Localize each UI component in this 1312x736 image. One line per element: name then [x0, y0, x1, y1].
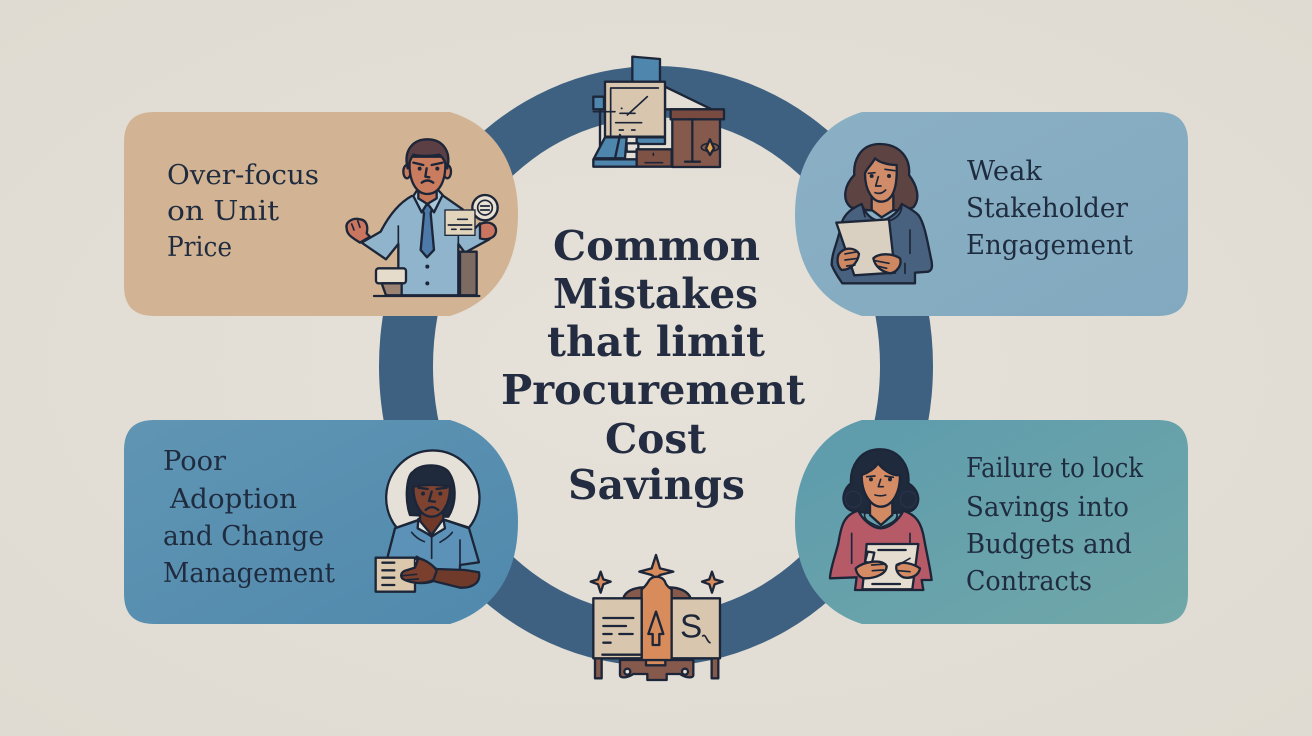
- label: over-focus on unit price: on Unit: [167, 196, 279, 227]
- icon: budget documents and arrow: [591, 555, 723, 680]
- glyph: S: S: [680, 608, 702, 645]
- label: weak stakeholder engagement: Engagement: [966, 230, 1133, 261]
- title: Procurement: [501, 366, 805, 414]
- title: Mistakes: [553, 270, 758, 318]
- label: weak stakeholder engagement: Stakeholder: [966, 193, 1128, 224]
- panel: poor adoption and change management: [124, 420, 518, 624]
- label: poor adoption and change management: Adoption: [169, 484, 297, 515]
- label: failure to lock savings into budgets and contracts: Failure to lock: [966, 453, 1144, 484]
- central ring: [379, 66, 933, 666]
- label: poor adoption and change management: Management: [163, 558, 335, 589]
- title: that limit: [547, 318, 765, 366]
- title: Common: [553, 222, 760, 270]
- panel: over-focus on unit price: [124, 112, 518, 316]
- label: poor adoption and change management: Poor: [163, 446, 226, 477]
- label: poor adoption and change management: and Change: [163, 521, 324, 552]
- icon: woman with budget paper: [830, 449, 932, 590]
- icon: man with price tag: [346, 139, 498, 296]
- icon: office desk and computer: [593, 57, 724, 167]
- panel: failure to lock savings: [795, 420, 1188, 624]
- label: over-focus on unit price: Price: [167, 232, 232, 263]
- label: failure to lock savings into budgets and contracts: Contracts: [966, 566, 1092, 597]
- label: over-focus on unit price: Over-focus: [167, 160, 319, 191]
- icon: man in circle with document: [376, 450, 479, 592]
- label: failure to lock savings into budgets and contracts: Budgets and: [966, 529, 1132, 560]
- label: weak stakeholder engagement: Weak: [967, 156, 1043, 187]
- title: Cost: [605, 415, 706, 463]
- title: Savings: [568, 461, 745, 509]
- panel: weak stakeholder engagement: [795, 112, 1188, 316]
- icon: woman holding paper: [832, 144, 932, 283]
- label: failure to lock savings into budgets and contracts: Savings into: [966, 492, 1129, 523]
